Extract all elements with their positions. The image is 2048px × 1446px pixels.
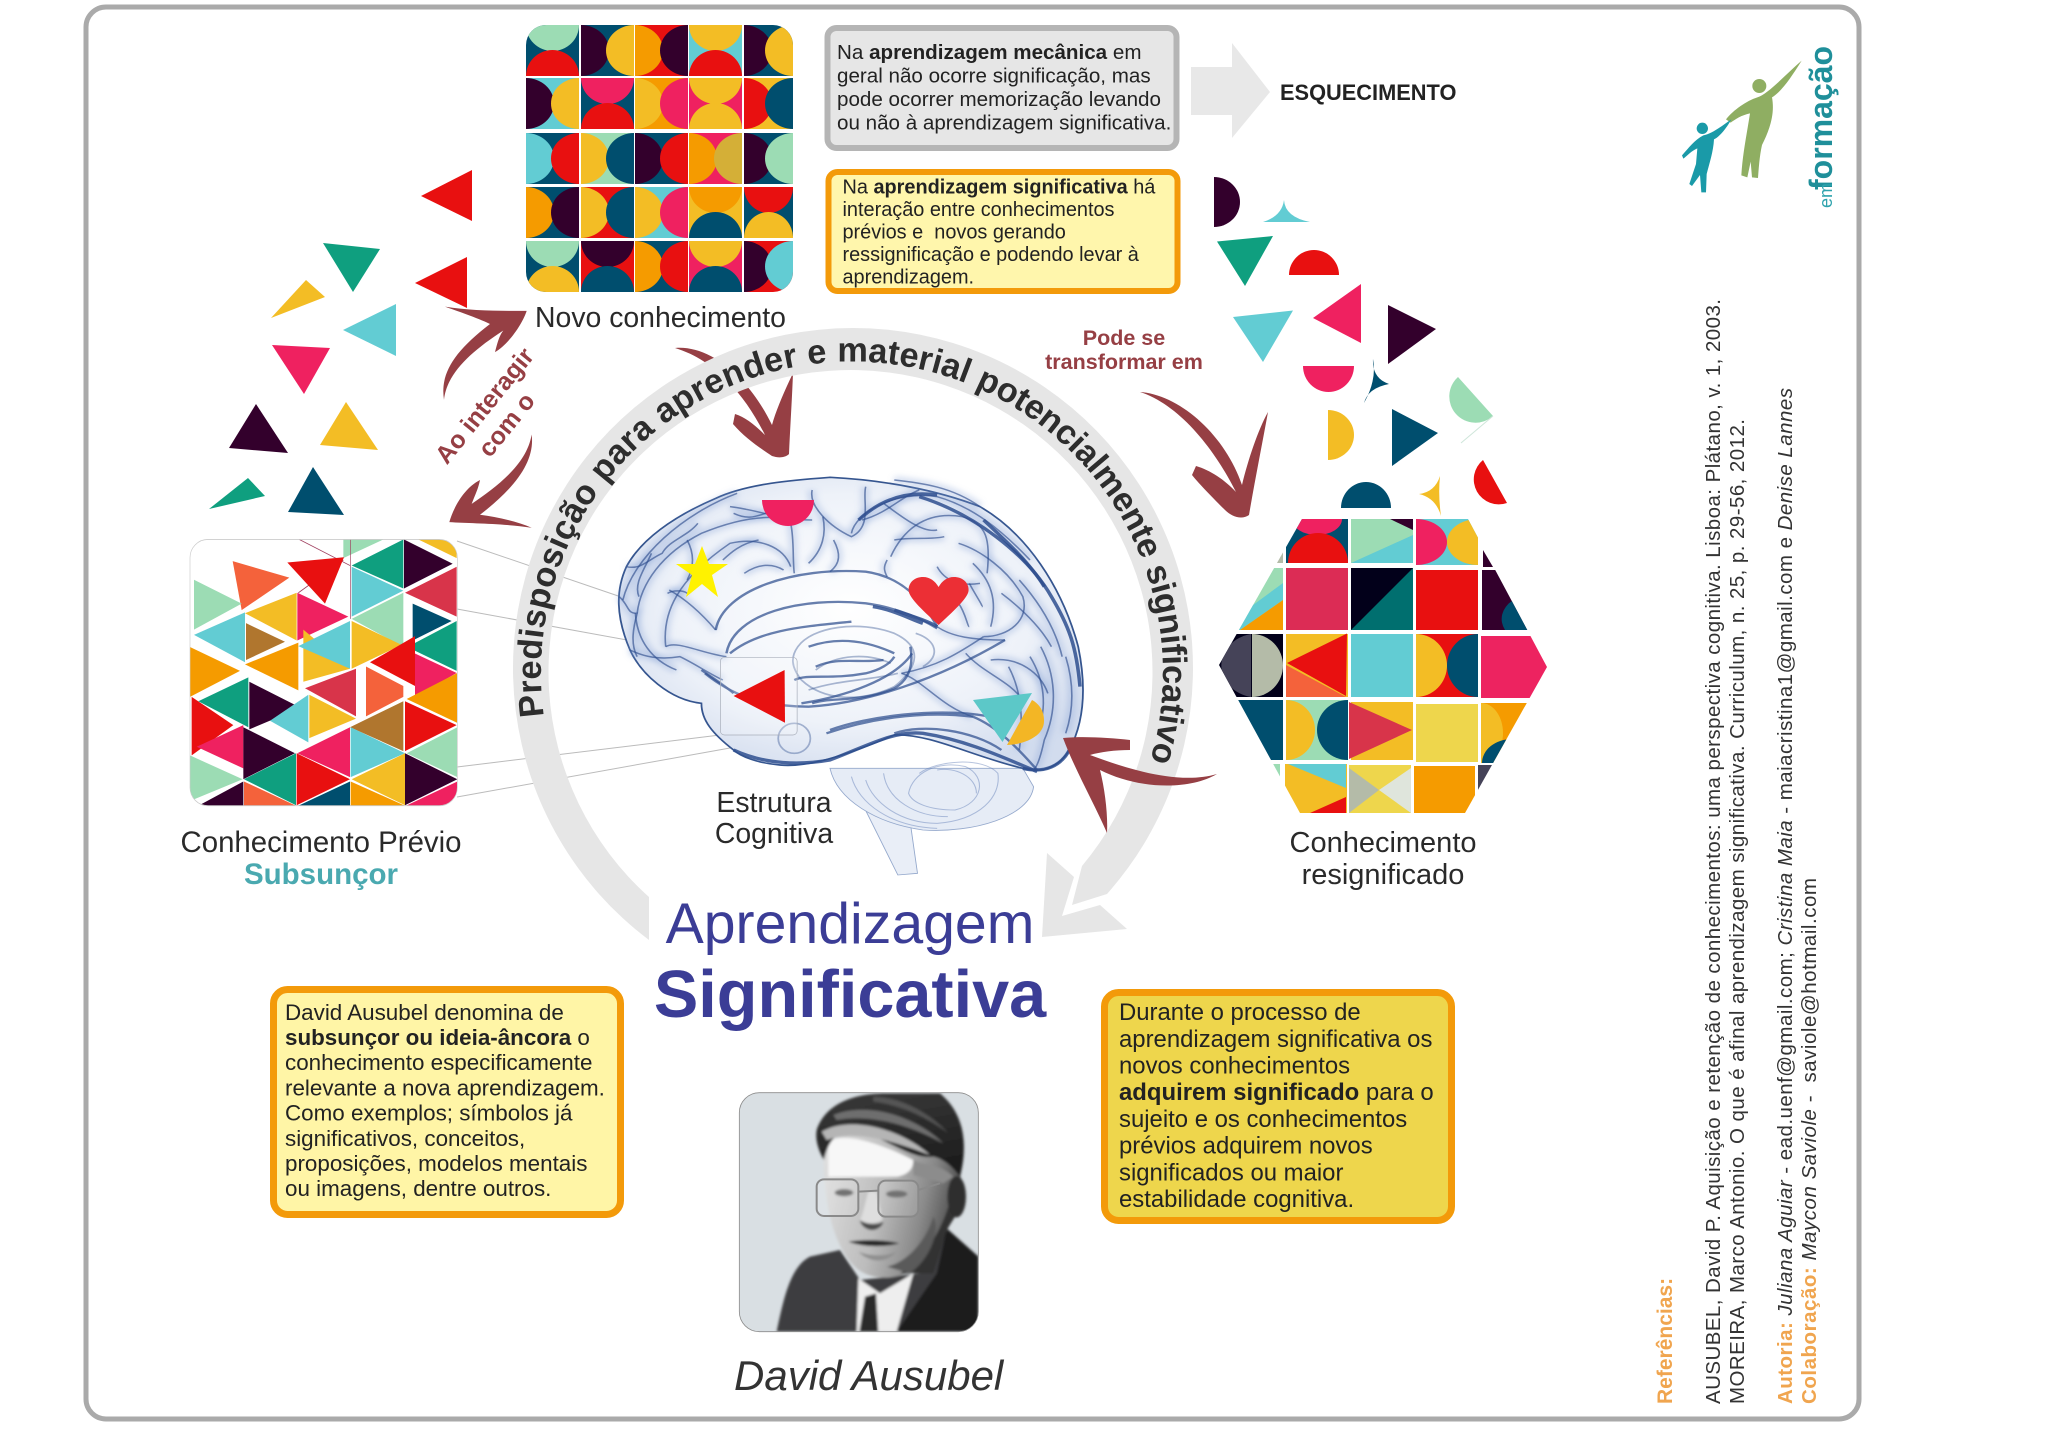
label: esquecimento: ESQUECIMENTO [1280,80,1456,105]
label: conhecimento ressignificado: resignificado [1302,859,1464,891]
callout: aprendizagem significativa: aprendizagem. [842,266,974,288]
callout: adquirem significado: significados ou maior [1119,1160,1343,1186]
callout: subsuncor: significativos, conceitos, [285,1126,525,1151]
brain symbols [676,500,1044,745]
connector lines from tile to brain [457,541,797,797]
callout: aprendizagem significativa: Na aprendizagem significativa há [842,176,1155,198]
label: conhecimento ressignificado: Conhecimento [1290,827,1476,859]
label: pode se transformar em [1045,326,1203,374]
callout: adquirem significado: adquirem significado para o [1119,1079,1434,1106]
tile: conhecimento previo [190,539,457,806]
label: ao interagir com o: Ao interagir [430,342,540,469]
callout: aprendizagem mecanica [828,28,1176,148]
callout: adquirem significado: aprendizagem significativa os [1119,1026,1432,1053]
label: ao interagir com o: com o [473,388,541,462]
callout: aprendizagem significativa: ressignificação e podendo levar à [842,244,1140,266]
label: novo conhecimento: Novo conhecimento [535,302,786,334]
title: Significativa [654,958,1047,1032]
brain illustration [619,477,1083,875]
callout: subsuncor: proposições, modelos mentais [285,1151,587,1176]
callout: subsuncor: conhecimento especificamente [285,1050,592,1075]
callout: aprendizagem significativa: interação entre conhecimentos [842,199,1115,221]
callout: subsuncor: Como exemplos; símbolos já [285,1100,573,1126]
credits: Colaboração: Maycon Saviole - saviole@hotmail.com [1798,878,1821,1404]
logo: em formacao [1682,46,1839,208]
label: conhecimento previo / subsuncor: Subsunçor [244,858,399,891]
callout: aprendizagem mecanica: pode ocorrer memorização levando [837,88,1161,111]
callout: subsuncor: relevante a nova aprendizagem. [285,1076,605,1100]
scattered triangles: left [209,170,472,515]
callout: adquirem significado: sujeito e os conhecimentos [1119,1106,1407,1133]
callout: aprendizagem mecanica: geral não ocorre significação, mas [837,64,1151,88]
reference lines: MOREIRA, Marco Antonio. O que é afinal aprendizagem significativa. Curriculum, n. 25, p. 29-56, 2012. [1726,419,1749,1404]
logo: em formacao: em [1816,183,1836,208]
callout: adquirem significado: Durante o processo de [1119,999,1361,1026]
callout: adquirem significado: prévios adquirem novos [1119,1132,1373,1160]
title [654,892,1047,1032]
label: conhecimento ressignificado [1290,827,1476,891]
label: estrutura cognitiva: Estrutura [716,787,832,819]
callout: aprendizagem significativa: prévios e novos gerando [842,222,1066,244]
reference lines: AUSUBEL, David P. Aquisição e retenção de conhecimentos: uma perspectiva cognitiva. Lisboa: Plátano, v. 1, 2003. [1702,299,1725,1404]
reference lines [1702,299,1749,1404]
label: conhecimento previo / subsuncor: Conhecimento Prévio [180,826,462,859]
arrow: novo conhecimento into brain [675,348,793,457]
callout: adquirem significado: estabilidade cognitiva. [1119,1186,1354,1213]
callout: aprendizagem mecanica: ou não à aprendizagem significativa. [837,112,1171,134]
arrow: to esquecimento [1191,43,1270,138]
heading: referencias: Referências: [1654,1278,1677,1404]
circular arrow band [513,328,1193,940]
caption: david ausubel: David Ausubel [734,1352,1005,1399]
credits [1774,388,1821,1404]
callout: aprendizagem significativa [828,172,1178,291]
label: pode se transformar em: Pode se [1083,326,1165,350]
callout: subsuncor: David Ausubel denomina de [285,1000,564,1025]
references and credits [1654,299,1821,1404]
arrow: to ressignificado [1140,392,1268,517]
tile: conhecimento ressignificado hexagon [1219,503,1550,813]
callout: subsuncor [274,990,620,1214]
callout: adquirem significado [1104,992,1452,1220]
callout: aprendizagem mecanica: Na aprendizagem mecânica em [837,41,1141,64]
arrows: novo and previo interaction [443,307,532,528]
callout: subsuncor: ou imagens, dentre outros. [285,1176,551,1201]
title: Aprendizagem [666,892,1034,956]
photo: david ausubel [739,1093,978,1332]
credits: Autoria: Juliana Aguiar - ead.uenf@gmail.com; Cristina Maia - maiacristina1@gmail.com e Denise Lannes [1774,388,1797,1404]
callout: subsuncor: subsunçor ou ideia-âncora o [285,1025,590,1050]
tile: novo conhecimento [526,25,797,292]
callout: adquirem significado: novos conhecimentos [1119,1052,1350,1080]
scattered shapes: right [1214,177,1507,516]
arrow: ressignificado back to brain [1063,737,1217,833]
label: pode se transformar em: transformar em [1045,350,1203,374]
curved text on band: Predisposição para aprender e material potencialmente significativo [517,342,1188,763]
logo: em formacao: formação [1803,46,1839,190]
label: conhecimento previo / subsuncor [180,826,462,891]
label: estrutura cognitiva [715,787,833,850]
label: estrutura cognitiva: Cognitiva [715,818,833,850]
